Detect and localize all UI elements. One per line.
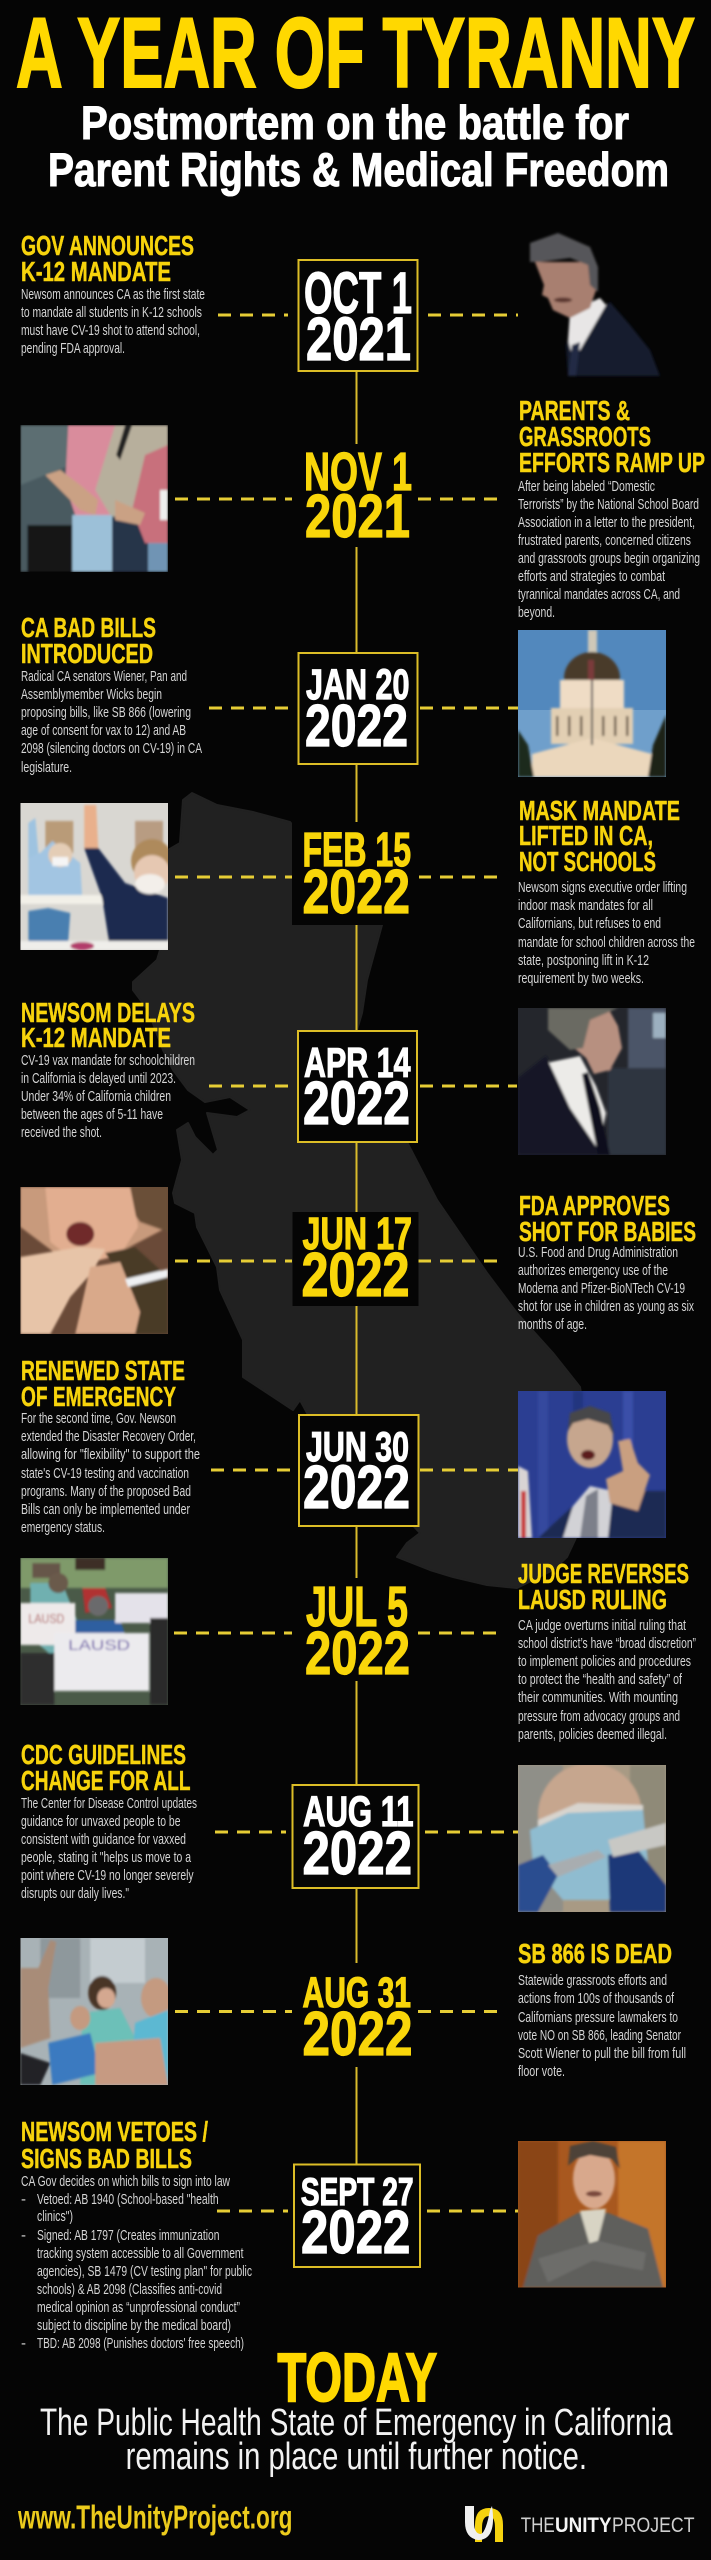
date box: 2022 bbox=[301, 2198, 410, 2266]
heading: INTRODUCED bbox=[21, 638, 153, 669]
body text: legislature. bbox=[21, 759, 72, 776]
heading bbox=[21, 1355, 185, 1412]
date: 2022 bbox=[302, 1241, 410, 1310]
body text: proposing bills, like SB 866 (lowering bbox=[21, 704, 191, 721]
California state silhouette bbox=[133, 793, 590, 1588]
body text: schools) & AB 2098 (Classifies anti-covid bbox=[37, 2281, 222, 2298]
connector dashes bbox=[209, 1084, 517, 1088]
body text: CA Gov decides on which bills to sign into law bbox=[21, 2173, 230, 2190]
date box: 2022 bbox=[302, 1819, 412, 1887]
photo: linked arms bbox=[20, 425, 168, 572]
icon: unity logo mark bbox=[465, 2506, 503, 2542]
connector dashes bbox=[175, 2010, 504, 2013]
date box: 2022 bbox=[303, 1453, 410, 1521]
body text: clinics") bbox=[37, 2208, 73, 2225]
heading: NEWSOM VETOES / bbox=[21, 2116, 208, 2147]
photo: family cheering bbox=[20, 1938, 168, 2085]
body text: people, stating it "helps us move to a bbox=[21, 1849, 191, 1866]
body text: emergency status. bbox=[21, 1519, 105, 1536]
photo: nurse with vaccine bbox=[518, 1765, 666, 1912]
logo wordmark: UNITY bbox=[555, 2514, 612, 2537]
heading bbox=[518, 1558, 689, 1615]
body text: allowing for "flexibility" to support the bbox=[21, 1446, 200, 1463]
body text: medical opinion as “unprofessional conduct” bbox=[37, 2299, 240, 2316]
body text: state, postponing lift in K-12 bbox=[518, 952, 649, 969]
date box bbox=[298, 653, 418, 764]
date bbox=[292, 1208, 418, 1310]
date: 2022 bbox=[305, 1619, 410, 1687]
heading: LIFTED IN CA, bbox=[519, 820, 653, 851]
event: Jun 30 2022 bbox=[21, 1355, 666, 1538]
date box: APR 14 bbox=[304, 1039, 411, 1086]
heading: K-12 MANDATE bbox=[21, 256, 171, 287]
date box: 2021 bbox=[306, 305, 411, 373]
heading bbox=[519, 795, 680, 877]
body text: state's CV-19 testing and vaccination bbox=[21, 1465, 189, 1482]
photo: LAUSD protest: LAUSD bbox=[28, 1611, 64, 1626]
body text: subject to discipline by the medical board) bbox=[37, 2317, 231, 2334]
body text: indoor mask mandates for all bbox=[518, 897, 653, 914]
subtitle bbox=[48, 96, 669, 196]
body text: Newsom announces CA as the first state bbox=[21, 286, 205, 303]
date box: 2022 bbox=[303, 1069, 410, 1137]
photo: LAUSD protest bbox=[20, 1558, 168, 1705]
heading: K-12 MANDATE bbox=[21, 1022, 171, 1053]
event: Jan 20 2022 bbox=[21, 612, 666, 777]
date: AUG 31 bbox=[302, 1969, 411, 2017]
body text bbox=[21, 1410, 200, 1536]
body text: After being labeled “Domestic bbox=[518, 478, 655, 495]
footer logo bbox=[465, 2506, 695, 2542]
event: Feb 15 2022 bbox=[20, 795, 695, 987]
connector dashes bbox=[209, 706, 518, 710]
photo: crying baby vaccinated bbox=[20, 1187, 168, 1334]
today heading: TODAY bbox=[278, 2339, 437, 2416]
date box: JAN 20 bbox=[306, 661, 410, 709]
heading: CDC GUIDELINES bbox=[21, 1739, 186, 1770]
body text: agencies), SB 1479 (CV testing plan" for public bbox=[37, 2263, 252, 2280]
date: NOV 1 bbox=[304, 442, 412, 502]
heading: GOV ANNOUNCES bbox=[21, 230, 194, 261]
heading bbox=[21, 997, 195, 1053]
body text: to mandate all students in K-12 schools bbox=[21, 304, 202, 321]
connector dashes bbox=[174, 1632, 503, 1634]
body text bbox=[21, 1052, 195, 1141]
body text: Under 34% of California children bbox=[21, 1088, 171, 1105]
body text: consistent with guidance for vaxxed bbox=[21, 1831, 186, 1848]
body text: - bbox=[21, 2191, 26, 2208]
date box: SEPT 27 bbox=[301, 2171, 414, 2214]
body text: 2098 (silencing doctors on CV-19) in CA bbox=[21, 740, 202, 757]
connector dashes bbox=[217, 2210, 518, 2212]
body text: floor vote. bbox=[518, 2063, 565, 2080]
body text: Signed: AB 1797 (Creates immunization bbox=[37, 2227, 220, 2244]
body text: - bbox=[21, 2227, 26, 2244]
body text: age of consent for vax to 12) and AB bbox=[21, 722, 186, 739]
timeline vertical line bbox=[356, 371, 358, 2164]
today statement: remains in place until further notice. bbox=[126, 2436, 587, 2478]
heading bbox=[21, 230, 194, 287]
heading bbox=[21, 1739, 190, 1796]
date: 2022 bbox=[302, 858, 410, 927]
date bbox=[292, 822, 419, 927]
body text: Bills can only be implemented under bbox=[21, 1501, 190, 1518]
body text: between the ages of 5-11 have bbox=[21, 1106, 163, 1123]
body text: pending FDA approval. bbox=[21, 340, 125, 357]
date box bbox=[292, 1785, 418, 1888]
body text bbox=[21, 2173, 252, 2352]
logo wordmark: THE bbox=[521, 2514, 555, 2537]
connector dashes bbox=[215, 1830, 518, 1834]
date: 2022 bbox=[302, 2000, 412, 2069]
subtitle: Postmortem on the battle for bbox=[81, 96, 629, 149]
body text bbox=[518, 1244, 694, 1333]
date box bbox=[294, 2164, 420, 2267]
photo: children in masks bbox=[20, 803, 168, 950]
event: Sept 27 2022 bbox=[21, 2116, 666, 2352]
body text: must have CV-19 shot to attend school, bbox=[21, 322, 200, 339]
date: JUL 5 bbox=[306, 1575, 408, 1639]
body text: CV-19 vax mandate for schoolchildren bbox=[21, 1052, 195, 1069]
heading: CHANGE FOR ALL bbox=[21, 1765, 190, 1796]
photo: LAUSD protest: LAUSD bbox=[68, 1637, 130, 1654]
photo: Newsom portrait bbox=[530, 233, 660, 376]
event: Aug 31 2022 bbox=[20, 1938, 686, 2085]
date: 2021 bbox=[305, 482, 410, 550]
event: Oct 1 2021 bbox=[21, 230, 660, 376]
logo wordmark: PROJECT bbox=[612, 2514, 695, 2537]
body text: point where CV-19 no longer severely bbox=[21, 1867, 194, 1884]
body text: extended the Disaster Recovery Order, bbox=[21, 1428, 196, 1445]
date box: AUG 11 bbox=[303, 1788, 414, 1836]
body text bbox=[21, 1795, 197, 1902]
event: Jun 17 2022 bbox=[20, 1187, 696, 1334]
body text: - bbox=[21, 2335, 26, 2352]
heading: NEWSOM DELAYS bbox=[21, 997, 195, 1028]
body text: disrupts our daily lives." bbox=[21, 1885, 129, 1902]
photo: California capitol bbox=[518, 630, 666, 777]
connector dashes bbox=[218, 314, 518, 316]
date box: JUN 30 bbox=[306, 1423, 409, 1470]
body text: beyond. bbox=[518, 604, 555, 621]
heading bbox=[21, 612, 156, 669]
photo: Newsom pointing bbox=[518, 1391, 666, 1538]
date box bbox=[298, 260, 418, 373]
body text bbox=[21, 286, 205, 357]
heading bbox=[21, 2116, 208, 2174]
today statement bbox=[40, 2402, 673, 2478]
connector dashes bbox=[211, 1468, 518, 1472]
date box: 2022 bbox=[305, 693, 408, 759]
heading bbox=[519, 395, 705, 478]
body text: TBD: AB 2098 (Punishes doctors' free speech) bbox=[37, 2335, 244, 2352]
heading: OF EMERGENCY bbox=[21, 1381, 176, 1412]
body text: programs. Many of the proposed Bad bbox=[21, 1483, 191, 1500]
heading: RENEWED STATE bbox=[21, 1355, 185, 1386]
body text: tracking system accessible to all Government bbox=[37, 2245, 244, 2262]
body text: Vetoed: AB 1940 (School-based "health bbox=[37, 2191, 219, 2208]
connector dashes bbox=[175, 876, 504, 878]
body text: requirement by two weeks. bbox=[518, 970, 644, 987]
body text: Radical CA senators Wiener, Pan and bbox=[21, 668, 187, 685]
body text bbox=[518, 1972, 686, 2080]
body text bbox=[21, 668, 202, 776]
footer website: www.TheUnityProject.org bbox=[17, 2499, 293, 2536]
body text: months of age. bbox=[518, 1316, 587, 1333]
date bbox=[295, 1963, 417, 2069]
connector dashes bbox=[175, 1260, 504, 1262]
body text bbox=[518, 1617, 696, 1743]
date box bbox=[299, 1415, 418, 1526]
date: JUN 17 bbox=[302, 1208, 412, 1259]
date bbox=[296, 1575, 418, 1687]
connector dashes bbox=[175, 498, 504, 500]
body text bbox=[518, 478, 700, 621]
heading: SIGNS BAD BILLS bbox=[21, 2143, 192, 2174]
heading: CA BAD BILLS bbox=[21, 612, 156, 643]
body text: in California is delayed until 2023. bbox=[21, 1070, 176, 1087]
body text: For the second time, Gov. Newson bbox=[21, 1410, 176, 1427]
event: Apr 14 2022 bbox=[21, 997, 666, 1155]
event: Aug 11 2022 bbox=[21, 1739, 666, 1912]
body text bbox=[518, 879, 695, 987]
photo: Newsom arms folded bbox=[518, 2141, 666, 2288]
heading: PARENTS & bbox=[519, 395, 630, 426]
body text: Assemblymember Wicks begin bbox=[21, 686, 162, 703]
date: FEB 15 bbox=[302, 824, 411, 877]
body text: received the shot. bbox=[21, 1124, 102, 1141]
body text: The Center for Disease Control updates bbox=[21, 1795, 197, 1812]
logo wordmark bbox=[521, 2514, 695, 2537]
event: Jul 5 2022 bbox=[20, 1558, 696, 1743]
photo: Newsom speaking bbox=[518, 1008, 666, 1155]
date box: OCT 1 bbox=[304, 261, 412, 326]
body text: guidance for unvaxed people to be bbox=[21, 1813, 180, 1830]
event: Nov 1 2021 bbox=[20, 395, 705, 621]
date bbox=[296, 442, 418, 550]
heading bbox=[519, 1190, 696, 1247]
date box bbox=[298, 1031, 417, 1142]
